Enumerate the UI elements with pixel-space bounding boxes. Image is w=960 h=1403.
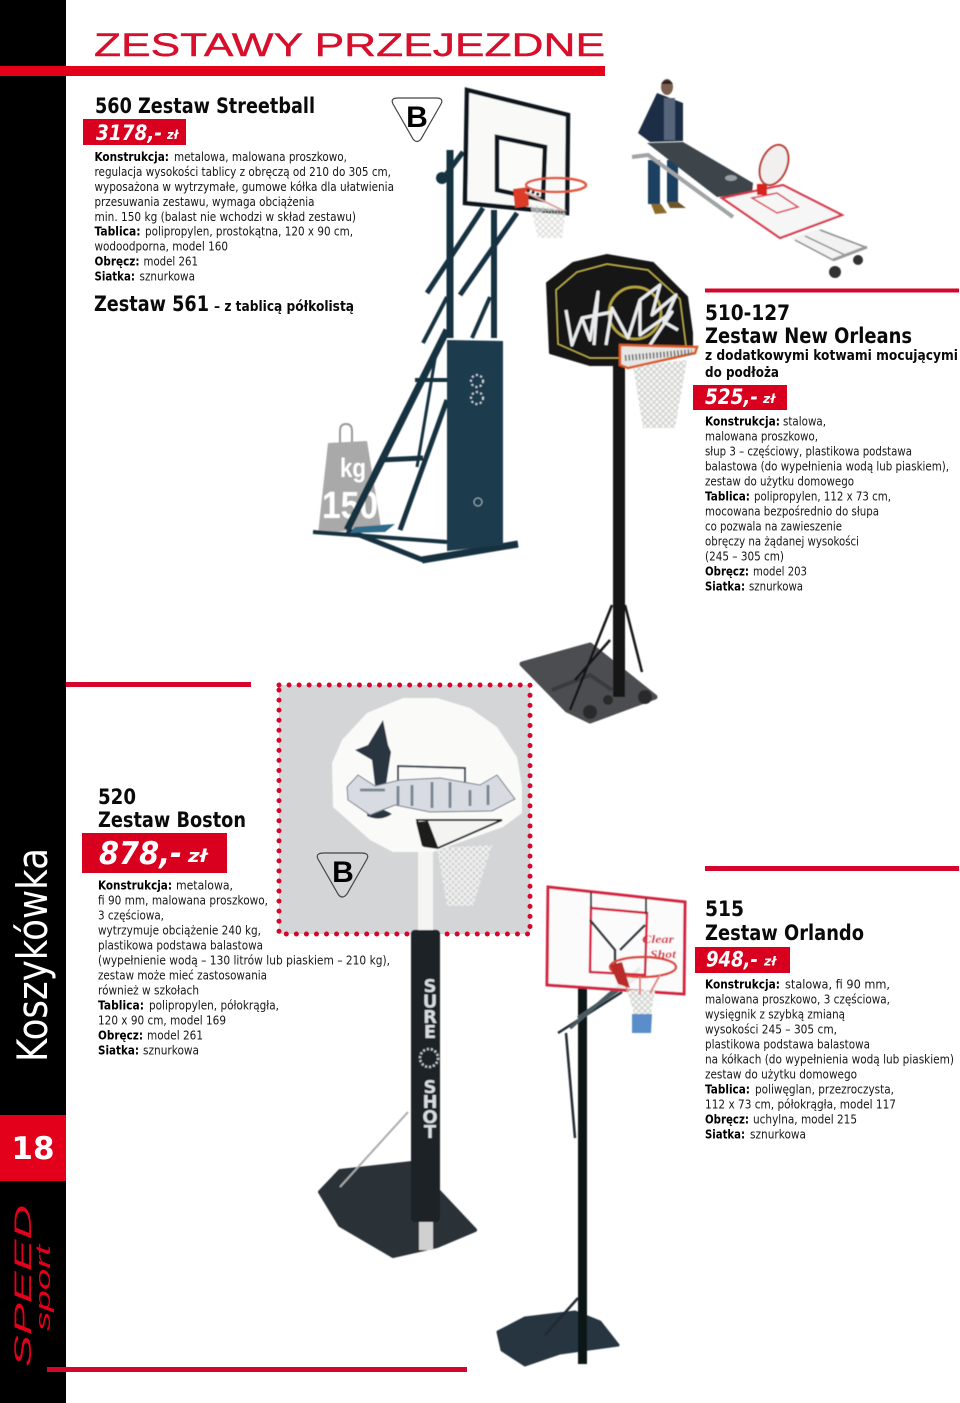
heading: do podłoża <box>705 365 779 381</box>
section rule: 515 <box>705 866 959 871</box>
description: Siatka: <box>705 1128 745 1142</box>
description: Konstrukcja: <box>94 150 169 164</box>
title rule <box>0 66 605 76</box>
description: model 203 <box>753 564 807 578</box>
description: regulacja wysokości tablicy z obręczą od 210 do 305 cm, <box>94 165 391 179</box>
padded sleeve <box>411 930 440 1222</box>
brand logo: SPEED sport: SPEED <box>10 1205 37 1367</box>
description: również w szkołach <box>98 984 199 998</box>
price tag: zł <box>763 954 778 968</box>
description: zestaw może mieć zastosowania <box>98 968 267 982</box>
folded ring <box>757 184 767 195</box>
net <box>627 990 655 1014</box>
rim and net <box>513 178 586 238</box>
weight 150 kg: 150 <box>322 485 378 527</box>
weight 150 kg: kg <box>340 453 366 483</box>
price tag: 3178,- <box>96 121 162 145</box>
block: 515 Zestaw Orlando <box>695 897 954 1142</box>
post top <box>418 850 433 935</box>
description: malowana proszkowo, 3 częściowa, <box>705 992 890 1006</box>
net <box>437 845 492 906</box>
description: Tablica: <box>705 490 750 504</box>
rim <box>610 957 676 977</box>
sidebar label: Koszykówka: Koszykówka <box>8 848 57 1062</box>
heading <box>98 785 246 832</box>
description: Tablica: <box>94 224 140 238</box>
heading: 520 <box>98 785 136 809</box>
padded sleeve: E <box>424 1022 436 1043</box>
padded sleeve: S <box>424 1077 436 1098</box>
description: zestaw do użytku domowego <box>705 1068 857 1082</box>
price tag <box>83 119 186 145</box>
description: polipropylen, prostokątna, 120 x 90 cm, <box>145 224 353 238</box>
description: Siatka: <box>705 580 745 594</box>
description: polipropylen, 112 x 73 cm, <box>754 490 891 504</box>
icon: B badge, Boston <box>317 853 368 897</box>
panel: grey backdrop with dotted border <box>279 685 530 934</box>
title: ZESTAWY PRZEJEZDNE <box>94 27 605 63</box>
description <box>98 878 390 1058</box>
post and arms <box>578 988 587 1364</box>
padded sleeve: O <box>422 1107 438 1128</box>
section rule: 520 <box>66 682 251 687</box>
description: wodoodporna, model 160 <box>94 240 228 254</box>
brand logo: SPEED sport: sport <box>33 1242 55 1331</box>
description <box>705 414 949 594</box>
description: model 261 <box>147 1028 203 1042</box>
description: (wypełnienie wodą – 130 litrów lub piaskiem – 210 kg), <box>98 954 390 968</box>
description: plastikowa podstawa balastowa <box>705 1038 870 1052</box>
sub-heading: Zestaw 561 <box>94 292 354 316</box>
description: 112 x 73 cm, półokrągła, model 117 <box>705 1098 896 1112</box>
backboard: Shot <box>650 947 677 961</box>
price tag: 878,- <box>99 836 182 872</box>
heading: Zestaw Orlando <box>705 921 864 945</box>
icon: B badge, Boston: B <box>332 856 354 889</box>
description: malowana proszkowo, <box>705 430 818 444</box>
frame <box>313 150 518 560</box>
description: sznurkowa <box>749 580 803 594</box>
net <box>633 360 687 428</box>
photo: Streetball hoop <box>313 90 586 560</box>
description: przesuwania zestawu, wymaga obciążenia <box>94 195 314 209</box>
price tag <box>693 385 787 410</box>
base <box>320 1163 475 1256</box>
rim <box>417 820 502 848</box>
description: sznurkowa <box>143 1044 199 1058</box>
description: co pozwala na zawieszenie <box>705 520 842 534</box>
description: sznurkowa <box>750 1128 806 1142</box>
description: wysięgnik z szybką zmianą <box>705 1008 845 1022</box>
bottom rule <box>47 1367 467 1372</box>
description: uchylna, model 215 <box>753 1112 857 1126</box>
description: wyposażona w wytrzymałe, gumowe kółka dla ułatwienia <box>94 180 394 194</box>
padded sleeve: R <box>423 1007 437 1028</box>
board <box>547 255 692 365</box>
page number box <box>0 1115 66 1181</box>
backboard <box>332 698 522 852</box>
brand logo: SPEED sport <box>10 1205 55 1367</box>
heading <box>705 301 958 381</box>
description: (245 – 305 cm) <box>705 550 784 564</box>
description: min. 150 kg (balast nie wchodzi w skład zestawu) <box>94 210 356 224</box>
price tag: 525,- <box>705 385 758 409</box>
photo: 510-127 hoop <box>522 255 697 721</box>
heading: Zestaw New Orleans <box>705 324 912 348</box>
description: wysokości 245 – 305 cm, <box>705 1022 837 1036</box>
base <box>498 1312 618 1365</box>
section rule: 510-127 <box>705 288 959 292</box>
price tag: 948,- <box>706 948 758 972</box>
price tag <box>82 833 227 873</box>
description: słup 3 – częściowy, plastikowa podstawa <box>705 444 912 458</box>
price tag: zł <box>166 128 179 142</box>
post and braces <box>613 365 625 697</box>
description: zestaw do użytku domowego <box>705 474 854 488</box>
description: metalowa, <box>176 878 233 892</box>
description: Konstrukcja: <box>705 978 780 992</box>
description: 3 częściowa, <box>98 908 164 922</box>
description: Konstrukcja: <box>705 414 780 428</box>
description: stalowa, fi 90 mm, <box>785 978 890 992</box>
description: Tablica: <box>98 998 144 1012</box>
description: fi 90 mm, malowana proszkowo, <box>98 894 268 908</box>
description: plastikowa podstawa balastowa <box>98 938 263 952</box>
description: Siatka: <box>94 270 135 284</box>
description: metalowa, malowana proszkowo, <box>174 150 347 164</box>
price tag <box>695 947 790 973</box>
weight 150 kg <box>318 424 381 534</box>
heading: 510-127 <box>705 301 790 325</box>
padded sleeve: S <box>424 976 436 997</box>
description: sznurkowa <box>140 270 195 284</box>
man <box>638 79 686 214</box>
description: Obręcz: <box>705 564 749 578</box>
photo: folded set with man <box>632 79 867 278</box>
backboard <box>547 887 685 994</box>
page number box: 18 <box>11 1131 55 1167</box>
price tag: zł <box>762 392 777 406</box>
photo: Orlando hoop <box>498 887 685 1365</box>
description: Obręcz: <box>98 1028 143 1042</box>
price tag: zł <box>187 846 209 867</box>
block: 510-127 Zestaw New Orleans <box>693 301 958 594</box>
description: 120 x 90 cm, model 169 <box>98 1014 226 1028</box>
description: obręczy na żądanej wysokości <box>705 534 859 548</box>
description: Siatka: <box>98 1044 139 1058</box>
folded board <box>722 185 842 238</box>
description: Obręcz: <box>705 1112 749 1126</box>
backboard <box>465 90 568 213</box>
backboard: Clear <box>642 932 674 946</box>
description <box>94 150 394 284</box>
description: stalowa, <box>783 414 826 428</box>
folded frame <box>632 155 733 217</box>
description: Konstrukcja: <box>98 878 172 892</box>
heading: Zestaw Boston <box>98 808 246 832</box>
icon: B badge, Streetball <box>392 98 442 142</box>
counterweight pad <box>447 340 503 551</box>
description: Obręcz: <box>94 254 140 268</box>
rim <box>620 345 697 368</box>
photo: Boston hoop <box>320 698 522 1256</box>
icon: B badge, Streetball: B <box>406 101 428 134</box>
description: Tablica: <box>705 1082 750 1096</box>
sidebar <box>0 0 66 1403</box>
heading: 560 Zestaw Streetball <box>95 94 315 118</box>
padded sleeve: H <box>422 1092 438 1113</box>
backboard graffiti <box>347 720 515 819</box>
padded sleeve: T <box>424 1122 437 1143</box>
heading <box>705 897 864 945</box>
description: mocowana bezpośrednio do słupa <box>705 504 879 518</box>
sub-heading: Zestaw 561: – z tablicą półkolistą <box>214 299 354 315</box>
block: 560 Zestaw Streetball <box>83 94 394 316</box>
description: model 261 <box>144 254 198 268</box>
heading: 515 <box>705 897 744 921</box>
padded sleeve: U <box>423 992 437 1012</box>
description: wytrzymuje obciążenie 240 kg, <box>98 924 261 938</box>
block: 520 Zestaw Boston <box>82 785 390 1058</box>
sub-heading: Zestaw 561: Zestaw 561 <box>94 292 209 316</box>
description <box>705 978 954 1142</box>
description: poliwęglan, przezroczysta, <box>755 1082 894 1096</box>
description: polipropylen, półokrągła, <box>149 998 279 1012</box>
base <box>522 645 655 721</box>
